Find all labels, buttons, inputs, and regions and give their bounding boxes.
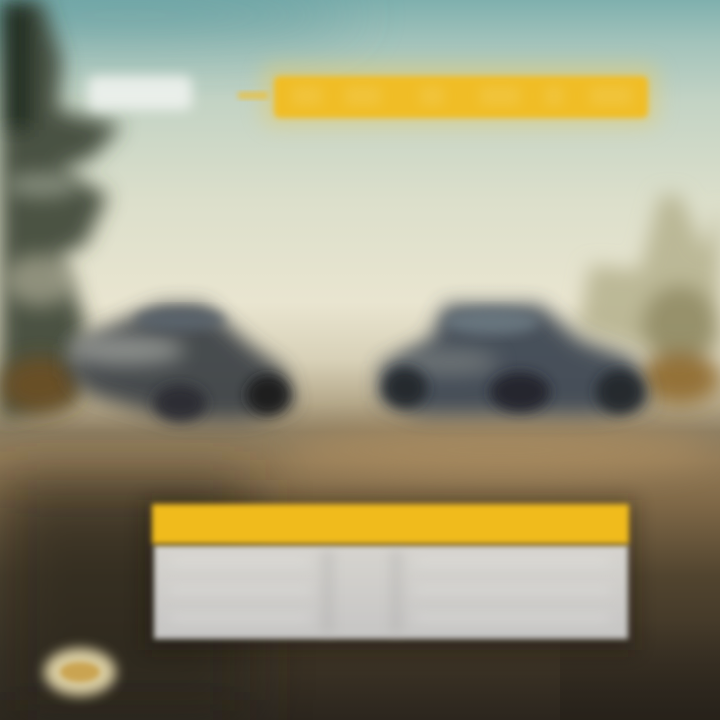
car: left bbox=[65, 305, 295, 421]
table shadow bbox=[145, 500, 635, 650]
tree: left foreground bbox=[0, 0, 122, 420]
car: right bbox=[380, 305, 650, 415]
logo badge: oval, bottom left bbox=[44, 648, 116, 696]
table header bbox=[152, 504, 629, 544]
trees: right background bbox=[578, 195, 720, 404]
heading: illegible white label, blurred bbox=[88, 76, 192, 110]
title letter mottling bbox=[292, 86, 632, 106]
table rows and columns bbox=[170, 550, 610, 634]
table body bbox=[154, 545, 628, 639]
table: illegible comparison table, blurred bbox=[145, 500, 635, 650]
heading: illegible yellow title, blurred bbox=[238, 64, 658, 126]
